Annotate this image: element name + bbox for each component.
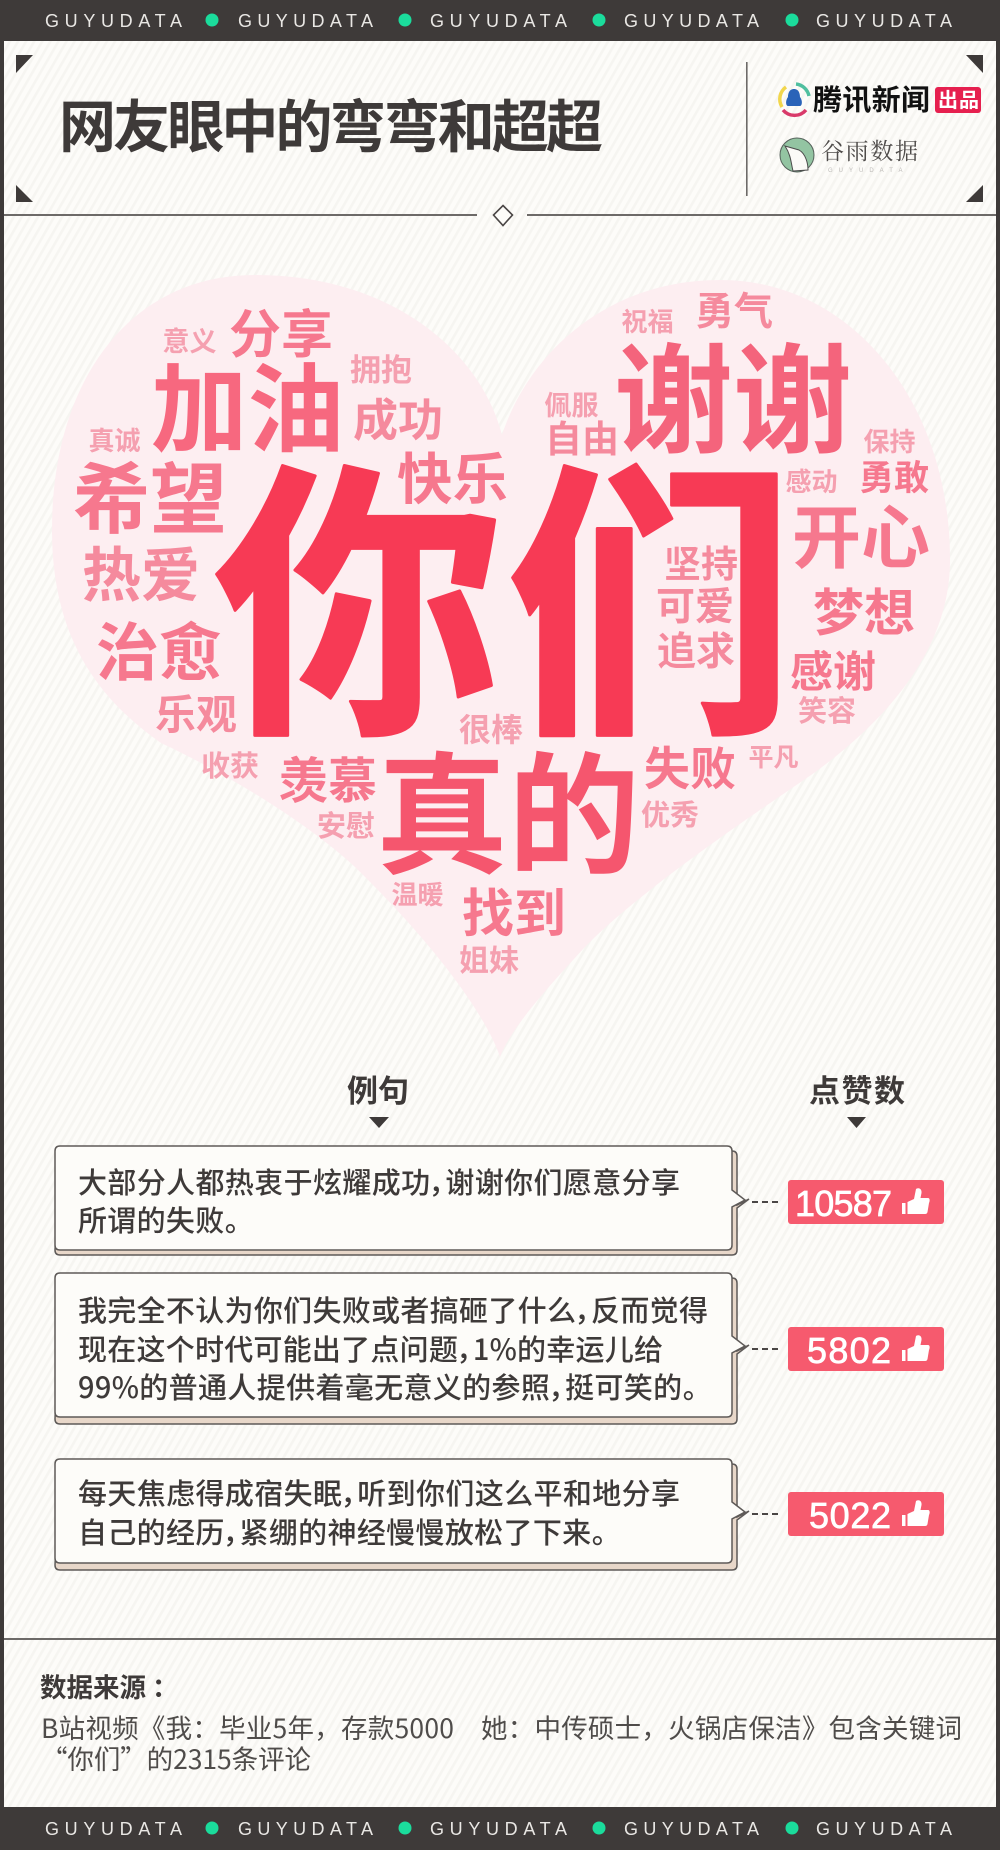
data source: “你们”的2315条评论 xyxy=(41,1738,311,1777)
like badge 1 xyxy=(752,1180,944,1224)
word: 保持: 保持 xyxy=(864,427,916,457)
card 2: 99%的普通人提供着毫无意义的参照，挺可笑的。 xyxy=(78,1365,697,1407)
like badge 2 xyxy=(752,1327,944,1371)
word: 感谢: 感谢 xyxy=(790,649,876,697)
word cloud xyxy=(73,291,930,978)
top banner: GUYUDATA xyxy=(238,11,373,31)
logo: Tencent News: 出品 xyxy=(938,89,979,112)
logo: Tencent News: 腾讯新闻 xyxy=(813,84,930,117)
bottom banner: GUYUDATA xyxy=(430,1819,567,1839)
like badge 1: 10587 xyxy=(795,1183,892,1224)
word: 追求: 追求 xyxy=(657,631,735,674)
bottom banner: GUYUDATA xyxy=(624,1819,759,1839)
logo: Guyu Data: GUYUDATA xyxy=(828,168,908,174)
like badge 2: 5802 xyxy=(807,1330,891,1371)
word: 可爱: 可爱 xyxy=(656,586,734,629)
divider with diamond xyxy=(4,206,996,226)
word: 感动: 感动 xyxy=(786,467,838,497)
word: 很棒: 很棒 xyxy=(459,712,523,748)
word: 笑容: 笑容 xyxy=(798,695,856,728)
heading: likes xyxy=(809,1074,905,1128)
word: 勇气: 勇气 xyxy=(695,291,773,334)
card 1: 大部分人都热衷于炫耀成功，谢谢你们愿意分享 xyxy=(78,1160,680,1202)
top banner: GUYUDATA xyxy=(624,11,759,31)
word: 找到: 找到 xyxy=(462,886,566,944)
word: 快乐: 快乐 xyxy=(397,449,508,511)
word: 温暖: 温暖 xyxy=(392,880,444,910)
word: 姐妹: 姐妹 xyxy=(459,945,519,978)
data source xyxy=(40,1673,962,1777)
logo: Guyu Data xyxy=(780,133,918,174)
word: 加油: 加油 xyxy=(151,358,344,465)
like badge 3: 5022 xyxy=(809,1495,891,1536)
word: 佩服: 佩服 xyxy=(544,391,598,421)
word: 安慰: 安慰 xyxy=(317,810,375,843)
logo: Tencent News xyxy=(780,84,981,117)
word: 梦想: 梦想 xyxy=(813,585,915,642)
bottom banner: GUYUDATA xyxy=(45,1819,182,1839)
icon: thumb up xyxy=(902,1188,930,1214)
bottom banner: GUYUDATA xyxy=(238,1819,373,1839)
icon: thumb up xyxy=(902,1500,930,1526)
word: 优秀: 优秀 xyxy=(641,799,699,832)
word: 乐观: 乐观 xyxy=(155,692,237,738)
word: 开心: 开心 xyxy=(792,500,930,577)
word: 真诚: 真诚 xyxy=(88,426,141,456)
top banner xyxy=(0,0,1000,41)
word: 勇敢: 勇敢 xyxy=(859,459,929,498)
logo: Guyu Data: 谷雨数据 xyxy=(821,133,918,166)
like badge 3 xyxy=(752,1492,944,1536)
data source: B站视频《我：毕业5年，存款5000 她：中传硕士，火锅店保洁》包含关键词 xyxy=(41,1707,962,1746)
icon: thumb up xyxy=(902,1335,930,1361)
card 2: 我完全不认为你们失败或者搞砸了什么，反而觉得 xyxy=(78,1288,708,1330)
top banner: GUYUDATA xyxy=(816,11,952,31)
top banner: GUYUDATA xyxy=(45,11,182,31)
word: 你们: 你们 xyxy=(214,449,795,772)
bottom banner xyxy=(0,1807,1000,1850)
word: 希望: 希望 xyxy=(73,458,227,544)
word: 祝福: 祝福 xyxy=(622,307,674,337)
card 1 xyxy=(55,1146,749,1255)
card 1: 所谓的失败。 xyxy=(78,1198,239,1240)
word: 羡慕: 羡慕 xyxy=(279,755,377,809)
top banner: GUYUDATA xyxy=(430,11,567,31)
word: 自由: 自由 xyxy=(545,419,619,460)
heart background xyxy=(52,275,950,1057)
word: 失败: 失败 xyxy=(644,743,736,795)
word: 分享: 分享 xyxy=(229,307,333,365)
heading: example sentences xyxy=(347,1074,409,1128)
bottom banner: GUYUDATA xyxy=(816,1819,952,1839)
data source: 数据来源： xyxy=(40,1673,178,1703)
card 3: 每天焦虑得成宿失眠，听到你们这么平和地分享 xyxy=(78,1471,680,1513)
word: 治愈: 治愈 xyxy=(96,619,222,689)
word: 意义: 意义 xyxy=(162,327,216,357)
word: 收获: 收获 xyxy=(201,750,259,783)
title: 网友眼中的弯弯和超超 xyxy=(59,96,603,160)
card 2: 现在这个时代可能出了点问题，1%的幸运儿给 xyxy=(78,1327,663,1369)
word: 热爱: 热爱 xyxy=(82,543,200,609)
heading: likes: 点赞数 xyxy=(809,1074,905,1109)
word: 成功: 成功 xyxy=(353,395,443,446)
word: 平凡: 平凡 xyxy=(748,744,799,772)
word: 坚持: 坚持 xyxy=(664,544,738,585)
word: 拥抱: 拥抱 xyxy=(350,353,412,388)
card 3: 自己的经历，紧绷的神经慢慢放松了下来。 xyxy=(78,1510,606,1552)
word: 谢谢: 谢谢 xyxy=(614,336,852,469)
heading: example sentences: 例句 xyxy=(347,1074,409,1109)
card 2 xyxy=(55,1273,749,1424)
corner marks xyxy=(16,55,983,202)
card 3 xyxy=(55,1459,749,1570)
word: 真的: 真的 xyxy=(376,744,640,891)
